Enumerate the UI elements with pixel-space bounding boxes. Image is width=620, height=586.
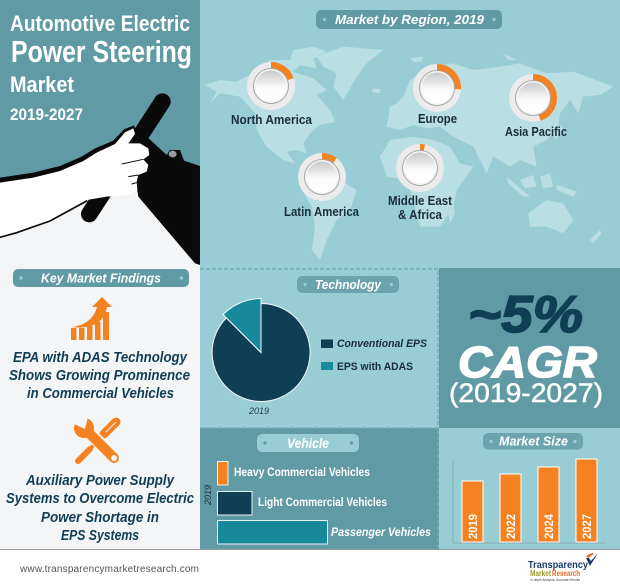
- donut: Asia Pacific: [509, 74, 557, 122]
- panel: key market findings: [6, 269, 194, 544]
- chart axes: [453, 460, 605, 543]
- pie year label: 2019: [248, 406, 269, 416]
- text: finding one: Shows Growing Prominence: [9, 368, 190, 384]
- CAGR value: ~5%: [468, 286, 583, 344]
- label: Middle East and Africa: & Africa: [398, 208, 443, 222]
- bar: heavy commercial vehicles: [218, 462, 370, 485]
- label: Asia Pacific: Asia Pacific: [505, 125, 567, 139]
- CAGR period: (2019-2027): [449, 378, 603, 408]
- panel: vehicle: [200, 428, 439, 549]
- donut: North America: [247, 62, 295, 110]
- bar: heavy commercial vehicles: Heavy Commercial Vehicles: [234, 467, 370, 479]
- heading: vehicle: Vehicle: [287, 436, 329, 451]
- bar: 2024: [538, 467, 559, 542]
- panel: header: [0, 0, 200, 549]
- illustration: hand on steering wheel: [0, 102, 200, 267]
- bar: passenger vehicles: Passenger Vehicles: [331, 527, 431, 539]
- heading: key market findings: Key Market Findings: [41, 270, 161, 286]
- title: Market: [10, 72, 75, 97]
- title: Power Steering: [11, 34, 192, 69]
- website url: www.transparencymarketresearch.com: [19, 564, 199, 575]
- bar: 2024: 2024: [542, 514, 556, 539]
- bar: 2019: [462, 481, 483, 542]
- bar: 2027: 2027: [580, 514, 594, 539]
- icon: wrench and screwdriver: [74, 417, 117, 461]
- panel: market by region: [200, 0, 620, 265]
- CAGR label: CAGR: [458, 338, 597, 387]
- heading: market size: [483, 433, 583, 450]
- heading: key market findings: [13, 269, 189, 287]
- legend: conventional EPS: Conventional EPS: [337, 338, 428, 350]
- panel: market size: [439, 428, 620, 549]
- logo: Transparency Market Research: Research: [552, 569, 580, 578]
- legend: EPS with ADAS: EPS with ADAS: [337, 361, 413, 373]
- label: Middle East and Africa: Middle East: [388, 194, 453, 208]
- donut: Middle East and Africa: [396, 144, 444, 192]
- label: Latin America: Latin America: [284, 205, 360, 219]
- heading: vehicle: [257, 434, 359, 452]
- label: North America: North America: [231, 113, 313, 127]
- title: Automotive Electric: [10, 11, 190, 36]
- text: finding two: EPS Systems: [61, 528, 139, 544]
- bar: 2022: [500, 474, 521, 542]
- bar: 2019: 2019: [466, 514, 480, 539]
- icon: growth chart with arrow: [71, 297, 112, 340]
- panel: technology: [200, 265, 439, 428]
- text: finding two: [6, 473, 194, 544]
- text: finding two: Power Shortage in: [41, 510, 159, 526]
- bar: 2027: [576, 459, 597, 542]
- donut: Europe: [413, 64, 461, 112]
- heading: market size: Market Size: [499, 434, 568, 448]
- heading: technology: Technology: [315, 277, 382, 292]
- footer: [0, 549, 620, 586]
- logo: Transparency Market Research: Transparency: [528, 559, 588, 571]
- text: finding one: in Commercial Vehicles: [27, 386, 174, 402]
- text: finding one: [9, 350, 190, 402]
- heading: technology: [297, 276, 399, 293]
- logo: Transparency Market Research: In-depth Analysis, Accurate Results: [530, 578, 580, 582]
- bar: light commercial vehicles: [218, 492, 387, 515]
- heading: market by region: Market by Region, 2019: [335, 12, 485, 27]
- donut: Latin America: [298, 153, 346, 201]
- bar: 2022: 2022: [504, 514, 518, 539]
- bar: light commercial vehicles: Light Commercial Vehicles: [258, 497, 387, 509]
- panel: CAGR: [439, 265, 620, 428]
- text: finding two: Auxiliary Power Supply: [25, 473, 175, 489]
- title: [10, 11, 192, 124]
- title: 2019-2027: [10, 105, 83, 124]
- label: Middle East and Africa: [388, 194, 453, 222]
- heading: market by region: [316, 10, 502, 29]
- text: finding one: EPA with ADAS Technology: [13, 350, 188, 366]
- logo: Transparency Market Research: [528, 553, 598, 582]
- world map: [205, 47, 613, 260]
- label: Europe: Europe: [418, 112, 457, 126]
- pie chart: [212, 298, 310, 401]
- logo: Transparency Market Research: Market: [530, 569, 551, 578]
- text: finding two: Systems to Overcome Electric: [6, 491, 194, 507]
- axis year label: 2019: [203, 485, 213, 506]
- bar: passenger vehicles: [218, 520, 431, 544]
